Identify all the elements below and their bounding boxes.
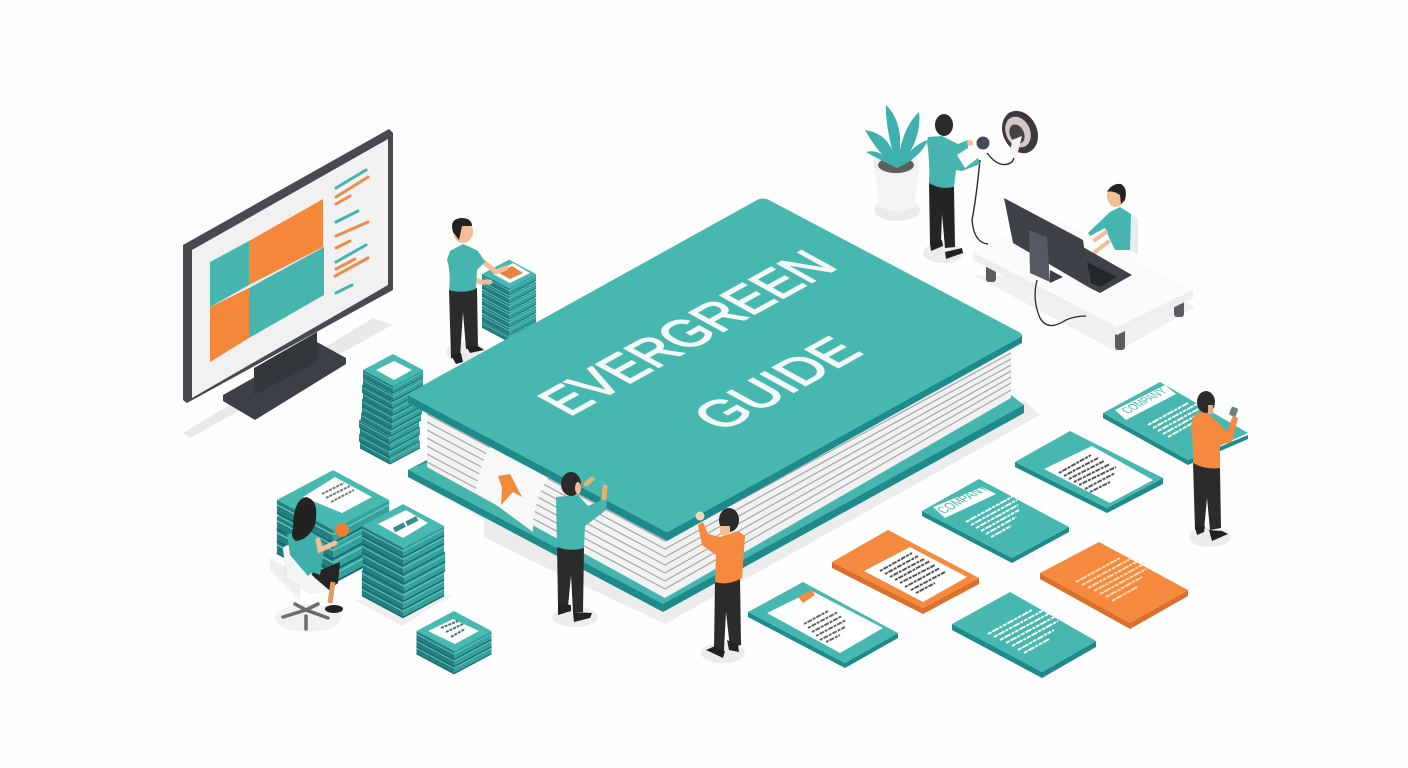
- shoes: [930, 240, 963, 259]
- torso: [447, 244, 485, 292]
- pot: [873, 163, 920, 212]
- arm: [318, 540, 335, 550]
- text lines: [1148, 403, 1202, 437]
- arm: [1095, 232, 1108, 252]
- chair: [283, 545, 334, 629]
- head: [1197, 391, 1215, 413]
- shoes: [451, 346, 484, 364]
- desk workstation: [973, 184, 1193, 350]
- small stack: [416, 611, 492, 674]
- legs: [714, 576, 741, 650]
- page block left: [427, 405, 665, 598]
- card: orange text: [1040, 542, 1188, 629]
- cable: [1035, 280, 1086, 326]
- desk shadow: [973, 275, 1195, 352]
- title: evergreen: EVERGREEN: [524, 243, 851, 423]
- giant book: [408, 198, 1024, 612]
- card: top white panel: [1015, 431, 1163, 513]
- orange object: [335, 523, 349, 537]
- monitor frame: [183, 129, 393, 403]
- white panel: [864, 547, 967, 602]
- monitor stand base: [223, 342, 346, 420]
- desk top: [973, 215, 1193, 327]
- legs: [449, 288, 478, 358]
- device: [976, 136, 990, 150]
- card: company center: COMPANY: [933, 482, 993, 515]
- label: [1115, 385, 1176, 420]
- torso: [556, 488, 608, 550]
- text lines: [1076, 558, 1146, 601]
- title: guide: GUIDE: [678, 329, 875, 438]
- screen block teal small: [210, 241, 249, 307]
- back cover: [408, 398, 1024, 612]
- shoes: [706, 640, 739, 658]
- torso: [927, 136, 980, 188]
- screen block teal wide: [249, 247, 324, 338]
- shoes: [1195, 526, 1228, 541]
- card: company right: COMPANY: [1117, 386, 1171, 415]
- cable: [972, 160, 988, 244]
- monitor stand neck: [254, 332, 317, 395]
- monitor floor shadow: [183, 318, 392, 438]
- person: teal shirt at stack: [446, 218, 536, 364]
- card: bottom left: [748, 582, 898, 668]
- arms: [458, 254, 506, 282]
- text lines: [988, 610, 1058, 653]
- legs: [1193, 462, 1221, 530]
- hands: [967, 140, 973, 146]
- legs: [929, 182, 955, 248]
- text lines: [966, 497, 1019, 537]
- hand: [696, 512, 704, 520]
- hair: [292, 497, 316, 541]
- curled page: [476, 440, 553, 532]
- laptop: [1083, 247, 1132, 293]
- screen text lines: [335, 170, 368, 293]
- stand: [1029, 230, 1050, 282]
- large stack: [277, 470, 389, 583]
- chair: [1128, 213, 1138, 254]
- orange arrow: [498, 474, 522, 505]
- torso: [287, 532, 325, 576]
- legs: [557, 543, 584, 612]
- page lines: [427, 353, 1011, 589]
- hands: [586, 479, 605, 498]
- torso: [1191, 411, 1238, 468]
- screen rear: [1004, 198, 1090, 288]
- person: orange shirt at book: [696, 508, 745, 663]
- stack beside monitor: [359, 354, 423, 464]
- card: orange white panel: [832, 530, 979, 614]
- screen block orange wide: [249, 199, 323, 285]
- monitor: [183, 129, 393, 438]
- stack top paper: [376, 361, 412, 380]
- white panel: [767, 591, 883, 653]
- label: [933, 487, 996, 518]
- stack top paper: [428, 619, 479, 644]
- middle stack: [355, 504, 452, 626]
- head: [719, 508, 739, 532]
- torso: [1088, 207, 1131, 250]
- shoes: [558, 604, 592, 622]
- legs: [311, 562, 340, 590]
- woman at stack: [270, 470, 389, 632]
- person seated: [1088, 184, 1138, 254]
- screen block orange small: [210, 288, 249, 362]
- person: orange shirt at right: [1189, 391, 1238, 547]
- page block right: [665, 345, 1011, 598]
- person: teal shirt at book: [552, 472, 608, 627]
- card: company center: [922, 479, 1069, 563]
- head: [1107, 185, 1125, 207]
- white panel: [1044, 446, 1153, 503]
- monitor screen: [192, 139, 388, 398]
- front cover: [408, 198, 1022, 532]
- person: teal shirt plugging cable: [923, 105, 1045, 263]
- head: [453, 219, 473, 243]
- head: [561, 472, 581, 496]
- head: [935, 114, 953, 136]
- book shadow: [400, 400, 1040, 624]
- stack of guides: [482, 260, 536, 342]
- card: teal text: [952, 592, 1096, 678]
- legs: [986, 265, 996, 282]
- torso: [698, 522, 745, 583]
- cover thickness: [408, 335, 1022, 541]
- stack top paper: [378, 510, 428, 538]
- wall socket: [995, 105, 1045, 159]
- plant: [865, 105, 928, 221]
- card: company right: [1103, 382, 1248, 465]
- leaves: [865, 105, 928, 168]
- hand and phone: [1229, 406, 1238, 417]
